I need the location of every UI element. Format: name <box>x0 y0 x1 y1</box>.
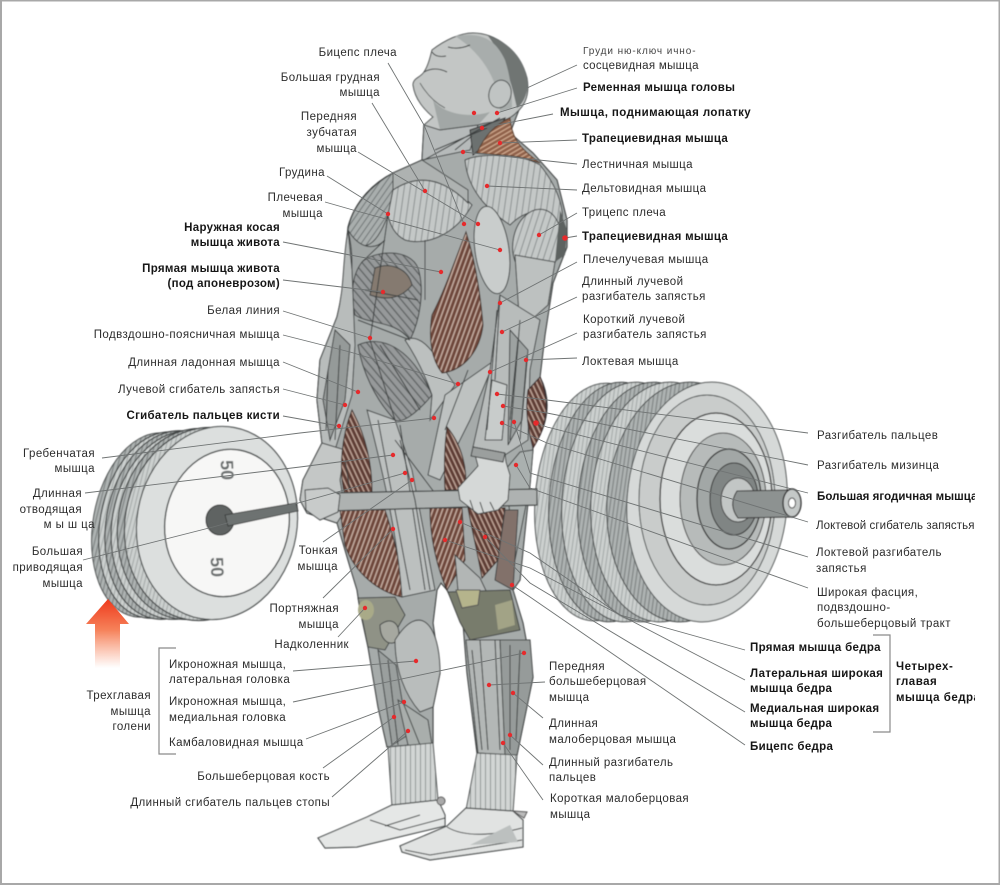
label: triceps surae: мышца <box>111 706 151 718</box>
label: flexor carpi radialis: Лучевой сгибатель запястья <box>118 384 280 396</box>
bracket: triceps surae <box>159 648 176 754</box>
abdominals and lat <box>352 232 495 480</box>
plate marking top: 50 <box>217 460 237 480</box>
label: brachialis: Плечевая <box>268 192 323 204</box>
label: triceps: Трицепс плеча <box>582 207 666 219</box>
label: flexor digitorum longus: Длинный сгибатель пальцев стопы <box>130 797 330 809</box>
right margin clip <box>975 480 998 710</box>
label: tibialis anterior: большеберцовая <box>549 676 647 688</box>
left lower leg <box>378 620 440 745</box>
label: gastrocnemius lateral: латеральная головка <box>169 674 290 686</box>
label: pectoralis major: мышца <box>340 87 380 99</box>
label: gracilis: Тонкая <box>299 545 338 557</box>
left arm and hand <box>300 230 355 523</box>
label: extensor digitorum: Разгибатель пальцев <box>817 430 938 442</box>
label: gastrocnemius lateral: Икроножная мышца, <box>169 659 286 671</box>
label: peroneus longus: малоберцовая мышца <box>549 734 677 746</box>
label: vastus lateralis: мышца бедра <box>750 683 833 695</box>
bracket: quadriceps <box>873 635 890 732</box>
label: biceps femoris: Бицепс бедра <box>750 741 833 753</box>
label: fascia lata: большеберцовый тракт <box>817 618 951 630</box>
label: gluteus maximus: Большая ягодичная мышца <box>817 491 978 503</box>
illustration: barbell and athlete <box>78 33 801 860</box>
label: adductor longus: Длинная <box>33 488 82 500</box>
label: quadriceps: главая <box>896 676 937 688</box>
label: extensor carpi radialis longus: Длинный лучевой <box>582 276 683 288</box>
label: peroneus brevis: Короткая малоберцовая <box>550 793 689 805</box>
neck muscles <box>422 118 540 163</box>
label: triceps surae: голени <box>112 721 151 733</box>
label: quadriceps: мышца бедра <box>896 692 981 704</box>
label: patella: Надколенник <box>274 639 350 651</box>
label: extensor carpi ulnaris: Локтевой разгибатель <box>816 547 942 559</box>
label: pectineus: мышца <box>55 463 95 475</box>
barbell plates left <box>78 414 313 633</box>
label: biceps: Бицепс плеча <box>319 47 397 59</box>
red arrow <box>86 599 129 668</box>
label: triceps surae: Трехглавая <box>86 690 151 702</box>
label: extensor digiti minimi: Разгибатель мизинца <box>817 460 939 472</box>
right hand on bar <box>458 447 510 514</box>
left shoulder and chest <box>345 160 472 305</box>
label: peroneus longus: Длинная <box>549 718 598 730</box>
shoes <box>318 797 527 860</box>
right lower leg <box>466 640 533 755</box>
label: serratus anterior: зубчатая <box>307 127 357 139</box>
label: extensor digitorum longus: пальцев <box>549 772 596 784</box>
label: gastrocnemius medial: Икроножная мышца, <box>169 696 286 708</box>
label: tibia: Большеберцовая кость <box>197 771 330 783</box>
label: vastus medialis: Медиальная широкая <box>750 703 879 715</box>
thigh muscles <box>340 410 518 620</box>
label: fascia lata: подвздошно- <box>817 602 891 614</box>
plate marking bottom: 50 <box>207 557 227 577</box>
label: finger flexor: Сгибатель пальцев кисти <box>126 410 280 422</box>
label: gastrocnemius medial: медиальная головка <box>169 712 286 724</box>
label: serratus anterior: мышца <box>317 143 357 155</box>
label: extensor digitorum longus: Длинный разгибатель <box>549 757 673 769</box>
head <box>413 33 528 135</box>
label: extensor carpi radialis longus: разгибатель запястья <box>582 291 706 303</box>
label: adductor magnus: приводящая <box>13 562 83 574</box>
label: linea alba: Белая линия <box>207 305 280 317</box>
socks <box>388 743 517 812</box>
label: extensor carpi ulnaris: запястья <box>816 563 867 575</box>
label: quadriceps: Четырех- <box>896 661 953 673</box>
label: rectus abdominis: Прямая мышца живота <box>142 263 280 275</box>
label: anconeus: Локтевая мышца <box>582 356 679 368</box>
right shoulder and upper arm <box>465 155 567 330</box>
label: levator scapulae: Мышца, поднимающая лопатку <box>560 107 751 119</box>
label: tibialis anterior: мышца <box>549 692 590 704</box>
label: extensor carpi radialis brevis: Короткий лучевой <box>583 314 685 326</box>
label: soleus: Камбаловидная мышца <box>169 737 304 749</box>
label: peroneus brevis: мышца <box>550 809 591 821</box>
label: scalene: Лестничная мышца <box>582 159 693 171</box>
muscle separation lines <box>345 215 520 590</box>
label: sternum: Грудина <box>279 167 325 179</box>
label: brachioradialis: Плечелучевая мышца <box>583 254 709 266</box>
label: flexor carpi ulnaris: Локтевой сгибатель запястья <box>816 520 975 532</box>
barbell bar <box>326 489 537 511</box>
label: tibialis anterior: Передняя <box>549 661 605 673</box>
label: rectus abdominis: (под апоневрозом) <box>167 278 280 290</box>
label: external oblique: Наружная косая <box>184 222 280 234</box>
label: adductor magnus: мышца <box>43 578 83 590</box>
label: pectineus: Гребенчатая <box>23 448 95 460</box>
label: serratus anterior: Передняя <box>301 111 357 123</box>
label: brachialis: мышца <box>283 208 323 220</box>
label: adductor longus: м ы ш ца <box>44 519 95 531</box>
label: extensor carpi radialis brevis: разгибатель запястья <box>583 329 707 341</box>
left hand on bar <box>305 488 340 520</box>
label: trapezius upper: Трапециевидная мышца <box>582 133 728 145</box>
label: vastus lateralis: Латеральная широкая <box>750 668 883 680</box>
label: palmaris longus: Длинная ладонная мышца <box>128 357 280 369</box>
athlete body silhouette <box>300 90 567 755</box>
red muscle markers <box>337 111 568 745</box>
label: pectoralis major: Большая грудная <box>281 72 380 84</box>
leader lines <box>83 63 808 800</box>
label: adductor longus: отводящая <box>20 504 82 516</box>
label: rectus femoris: Прямая мышца бедра <box>750 642 881 654</box>
label: fascia lata: Широкая фасция, <box>817 587 918 599</box>
barbell plates right <box>527 377 801 627</box>
label: sartorius: Портняжная <box>269 603 339 615</box>
knees <box>358 590 520 650</box>
label: iliopsoas: Подвздошно-поясничная мышца <box>94 329 280 341</box>
label: vastus medialis: мышца бедра <box>750 718 833 730</box>
right forearm <box>473 295 546 560</box>
label: external oblique: мышца живота <box>191 237 280 249</box>
label: deltoid: Дельтовидная мышца <box>582 183 707 195</box>
label: sternocleidomastoid: Груди ню-ключ ично- <box>583 46 696 57</box>
label: sternocleidomastoid: сосцевидная мышца <box>583 60 699 72</box>
label: trapezius lower: Трапециевидная мышца <box>582 231 728 243</box>
label: sartorius: мышца <box>299 619 339 631</box>
label: splenius capitis: Ременная мышца головы <box>583 82 735 94</box>
label: adductor magnus: Большая <box>32 546 83 558</box>
label: gracilis: мышца <box>298 561 338 573</box>
